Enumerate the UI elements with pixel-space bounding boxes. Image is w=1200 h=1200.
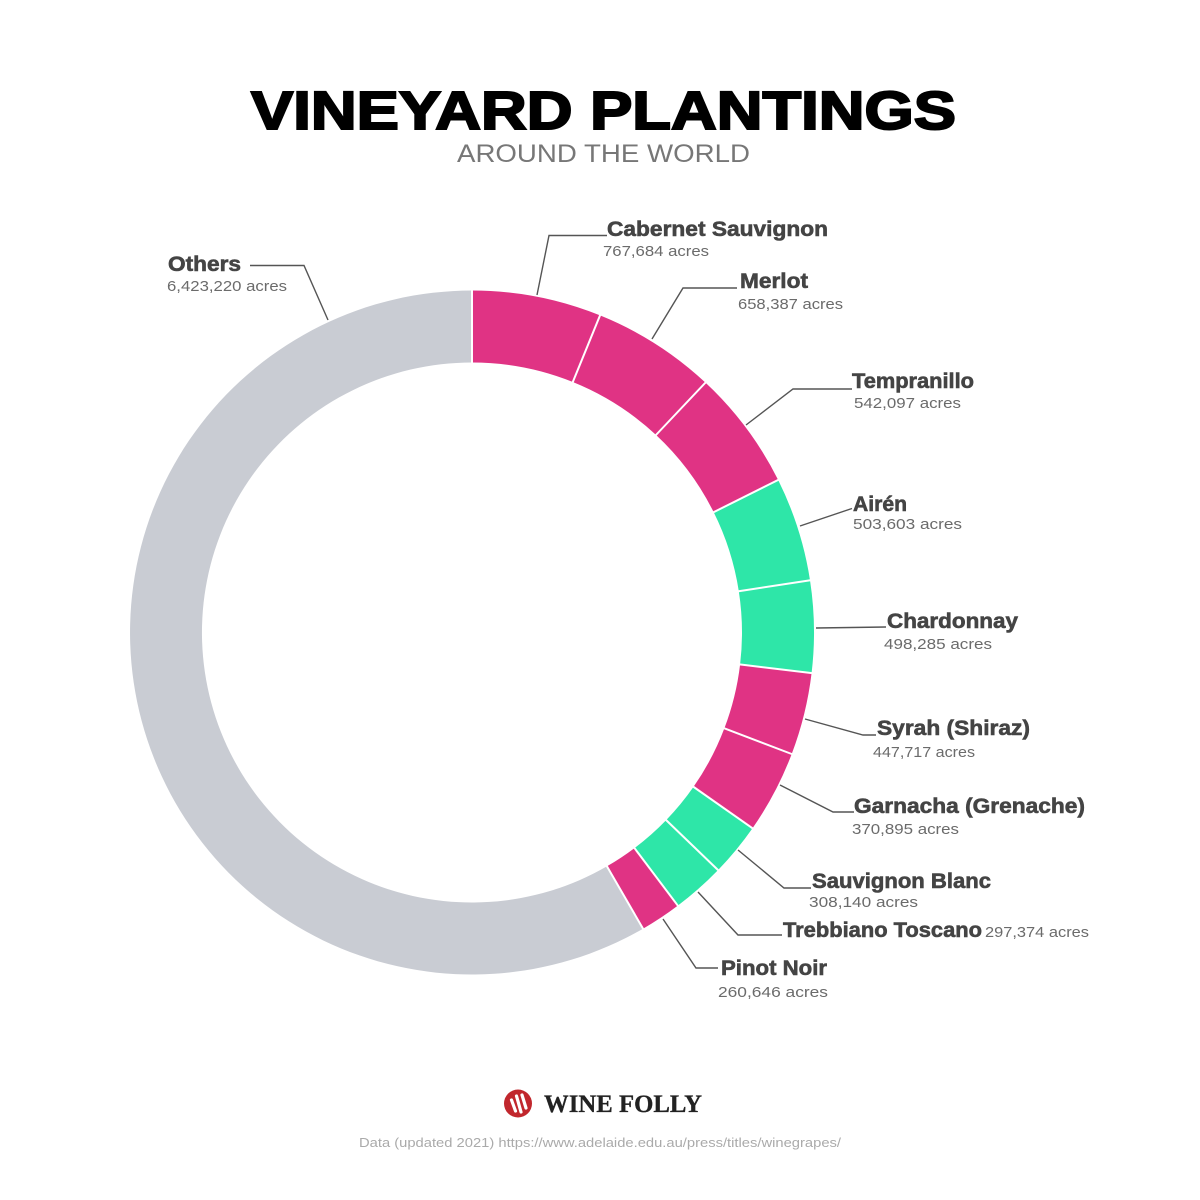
data source: Data (updated 2021) https://www.adelaide.edu.au/press/titles/winegrapes/ (359, 1135, 841, 1150)
label: Sauvignon Blanc: 308,140 acres (809, 894, 918, 911)
label: Cabernet Sauvignon (537, 218, 828, 295)
label: Chardonnay: Chardonnay (887, 610, 1018, 633)
label: Cabernet Sauvignon: Cabernet Sauvignon (607, 218, 828, 241)
label: Merlot (652, 270, 843, 339)
label: Sauvignon Blanc (738, 850, 991, 911)
segment: Sauvignon Blanc (666, 787, 752, 870)
label: Garnacha (Grenache): 370,895 acres (852, 821, 959, 838)
label: Trebbiano Toscano (698, 892, 1089, 942)
label: Others (167, 253, 328, 320)
label: Merlot: 658,387 acres (738, 296, 843, 313)
label: Chardonnay (816, 610, 1018, 653)
label: Airén: 503,603 acres (853, 516, 962, 533)
label: Pinot Noir (663, 919, 828, 1001)
segment: Merlot (573, 315, 705, 435)
segment: Syrah (724, 664, 812, 754)
label: Garnacha (Grenache) (780, 785, 1085, 838)
label: Tempranillo: 542,097 acres (854, 395, 961, 412)
label: Trebbiano Toscano: 297,374 acres (985, 924, 1089, 941)
segment: Others (130, 290, 643, 975)
label: Others: 6,423,220 acres (167, 278, 287, 295)
segment: Cabernet Sauvignon (472, 290, 600, 382)
label: Syrah (Shiraz): 447,717 acres (873, 744, 975, 761)
segment: Pinot Noir (607, 848, 678, 929)
subtitle: AROUND THE WORLD (457, 140, 750, 168)
segment: Airén (714, 480, 810, 591)
icon: red circle with bottles (504, 1090, 532, 1118)
label: Trebbiano Toscano: Trebbiano Toscano (783, 919, 982, 942)
label: Airén (800, 493, 962, 533)
label: Chardonnay: 498,285 acres (884, 636, 992, 653)
wordmark: WINE FOLLY (544, 1091, 702, 1118)
segment: Trebbiano Toscano (634, 820, 718, 906)
label: Pinot Noir: Pinot Noir (721, 957, 827, 980)
label: Sauvignon Blanc: Sauvignon Blanc (812, 870, 991, 893)
segment: Tempranillo (656, 382, 778, 512)
donut chart (130, 289, 814, 975)
label: Cabernet Sauvignon: 767,684 acres (603, 243, 709, 260)
label: Pinot Noir: 260,646 acres (718, 984, 828, 1001)
label: Merlot: Merlot (740, 270, 808, 293)
segment: Chardonnay (739, 580, 814, 673)
label: Others: Others (168, 253, 241, 276)
label: Airén: Airén (853, 493, 907, 516)
logo: Wine Folly (504, 1090, 702, 1118)
title: VINEYARD PLANTINGS (251, 81, 956, 141)
label: Tempranillo: Tempranillo (852, 370, 974, 393)
segment: Garnacha (694, 728, 792, 828)
label: Garnacha (Grenache): Garnacha (Grenache) (854, 795, 1085, 818)
label: Tempranillo (746, 370, 974, 425)
label: Syrah (Shiraz) (805, 717, 1030, 761)
label: Syrah (Shiraz): Syrah (Shiraz) (877, 717, 1030, 740)
